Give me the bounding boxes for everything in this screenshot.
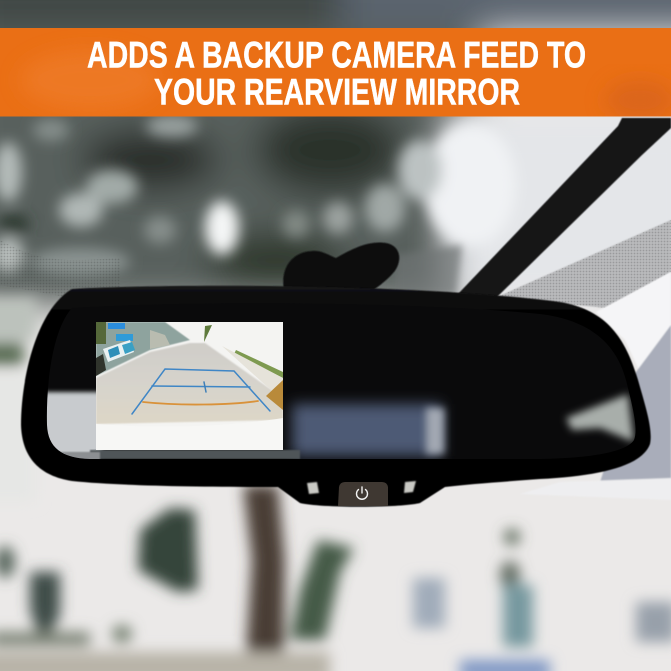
right pillar: white car interior [520,272,671,500]
power icon [356,487,368,499]
parking guide lines [132,369,270,414]
dotted frit band [0,240,120,296]
lower side of the left windscreen [0,298,36,502]
windshield strut [458,118,671,298]
mirror body [21,286,651,507]
lower blurred scenery [0,485,671,671]
banner [0,28,671,120]
glass reflections [40,392,634,460]
upper blurred trees [0,0,671,305]
right indicator [404,481,416,493]
mirror mount [283,242,399,296]
heading: YOUR REARVIEW MIRROR [154,72,520,112]
control pod [307,481,416,506]
grey sun visor area [497,220,671,308]
backup camera screen [96,322,283,450]
bokeh highlights [0,115,516,276]
rearview mirror [21,286,651,507]
mirror glass [47,303,636,459]
power button [338,482,388,506]
left indicator [307,482,319,494]
heading [87,34,586,112]
